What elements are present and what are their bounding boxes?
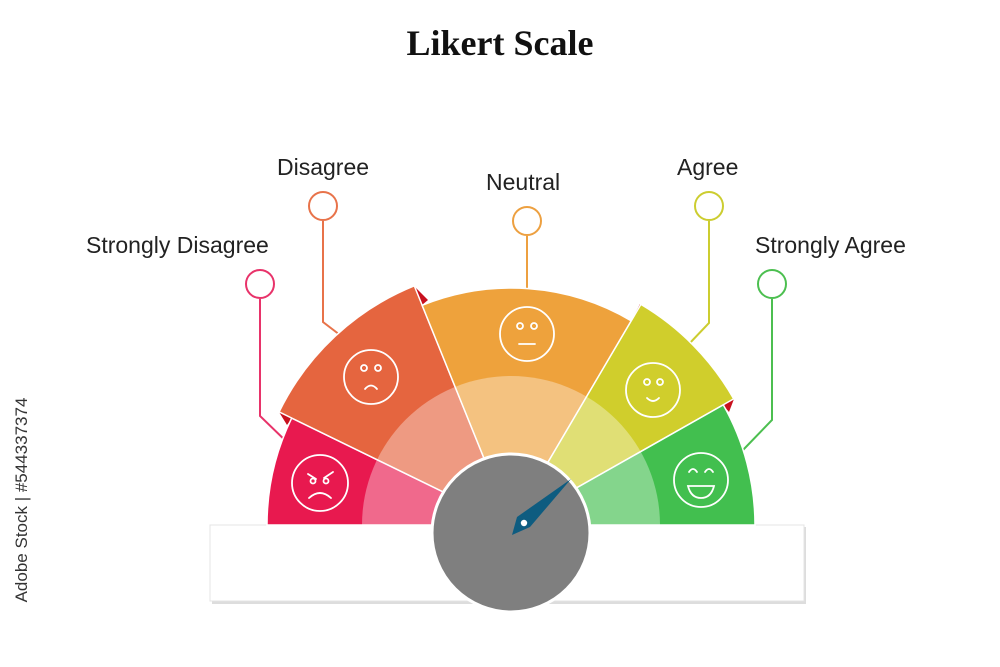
- fold shadows: [279, 286, 734, 425]
- segments: [267, 286, 755, 525]
- needle: [512, 479, 571, 535]
- base rectangle: [210, 525, 806, 604]
- gauge dial: [432, 454, 590, 612]
- label: Agree: Agree: [677, 154, 738, 180]
- side watermark text: Adobe Stock | #544337374: [12, 398, 31, 602]
- label: Neutral: Neutral: [486, 169, 560, 195]
- label: Disagree: Disagree: [277, 154, 369, 180]
- connector lines: [246, 192, 786, 450]
- label: Strongly Agree: Strongly Agree: [755, 232, 906, 258]
- faces: [292, 307, 728, 511]
- title: Likert Scale: [407, 23, 593, 63]
- label: Strongly Disagree: Strongly Disagree: [86, 232, 269, 258]
- inner ring: [362, 376, 660, 525]
